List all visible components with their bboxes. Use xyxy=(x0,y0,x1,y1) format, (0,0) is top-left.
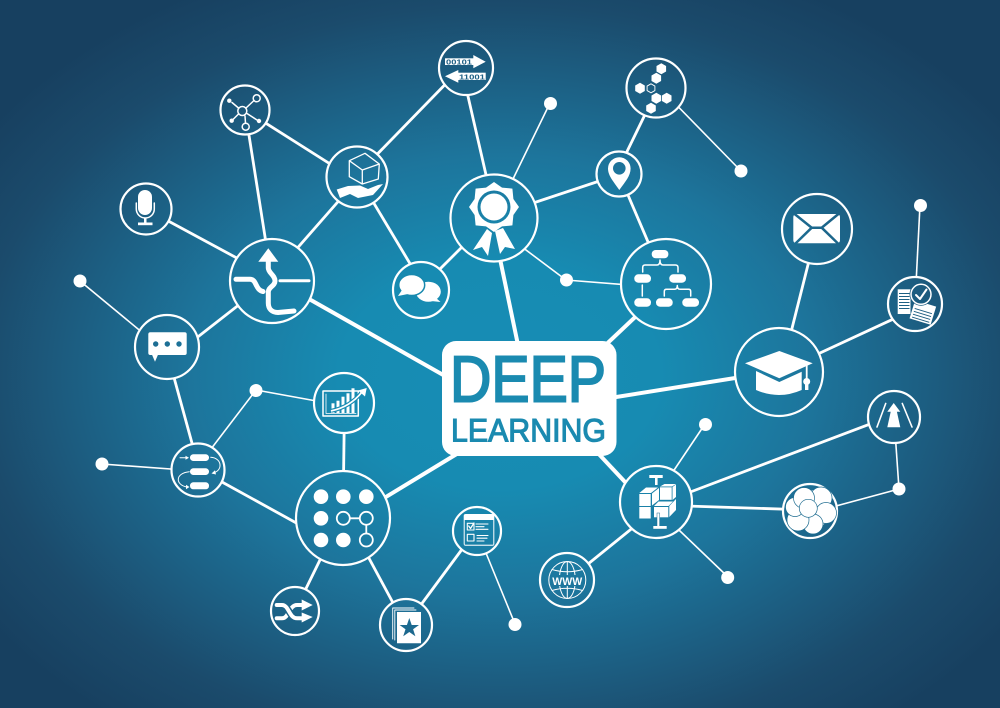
node: flow chart hierarchy xyxy=(621,239,711,329)
node: process stack xyxy=(172,444,224,496)
node: map pin xyxy=(596,152,642,196)
central title box xyxy=(442,341,616,456)
node: checked documents xyxy=(888,277,942,331)
node: dot matrix pattern xyxy=(296,471,390,565)
node: shuffle arrows xyxy=(271,587,319,635)
node: growth chart xyxy=(314,373,374,433)
node: award rosette xyxy=(450,174,538,262)
node: hexagon molecule xyxy=(626,58,686,118)
node: checklist xyxy=(453,507,501,555)
node: envelope xyxy=(782,194,852,264)
node: conversation bubbles xyxy=(393,262,449,318)
node: road decision junction xyxy=(230,239,314,323)
node: cell cluster flower xyxy=(783,484,837,538)
node: graduation cap xyxy=(735,328,823,416)
text: 11001: 11001 xyxy=(459,72,485,82)
node: binary data arrows xyxy=(439,41,493,95)
connector lines xyxy=(80,63,920,627)
node: cube on hand xyxy=(326,146,388,208)
title: LEARNING: LEARNING xyxy=(451,412,606,448)
text: WWW: WWW xyxy=(552,576,583,588)
node: speech message xyxy=(135,315,199,379)
text: 00101: 00101 xyxy=(446,58,472,67)
endpoint dots xyxy=(74,97,927,631)
node: road xyxy=(868,391,920,443)
node: www globe xyxy=(540,553,594,607)
node: network graph xyxy=(220,86,270,134)
node: microphone xyxy=(120,184,172,234)
node: data cubes with clamp xyxy=(620,466,692,538)
node: starred pages xyxy=(380,599,432,651)
title: DEEP: DEEP xyxy=(450,342,606,416)
